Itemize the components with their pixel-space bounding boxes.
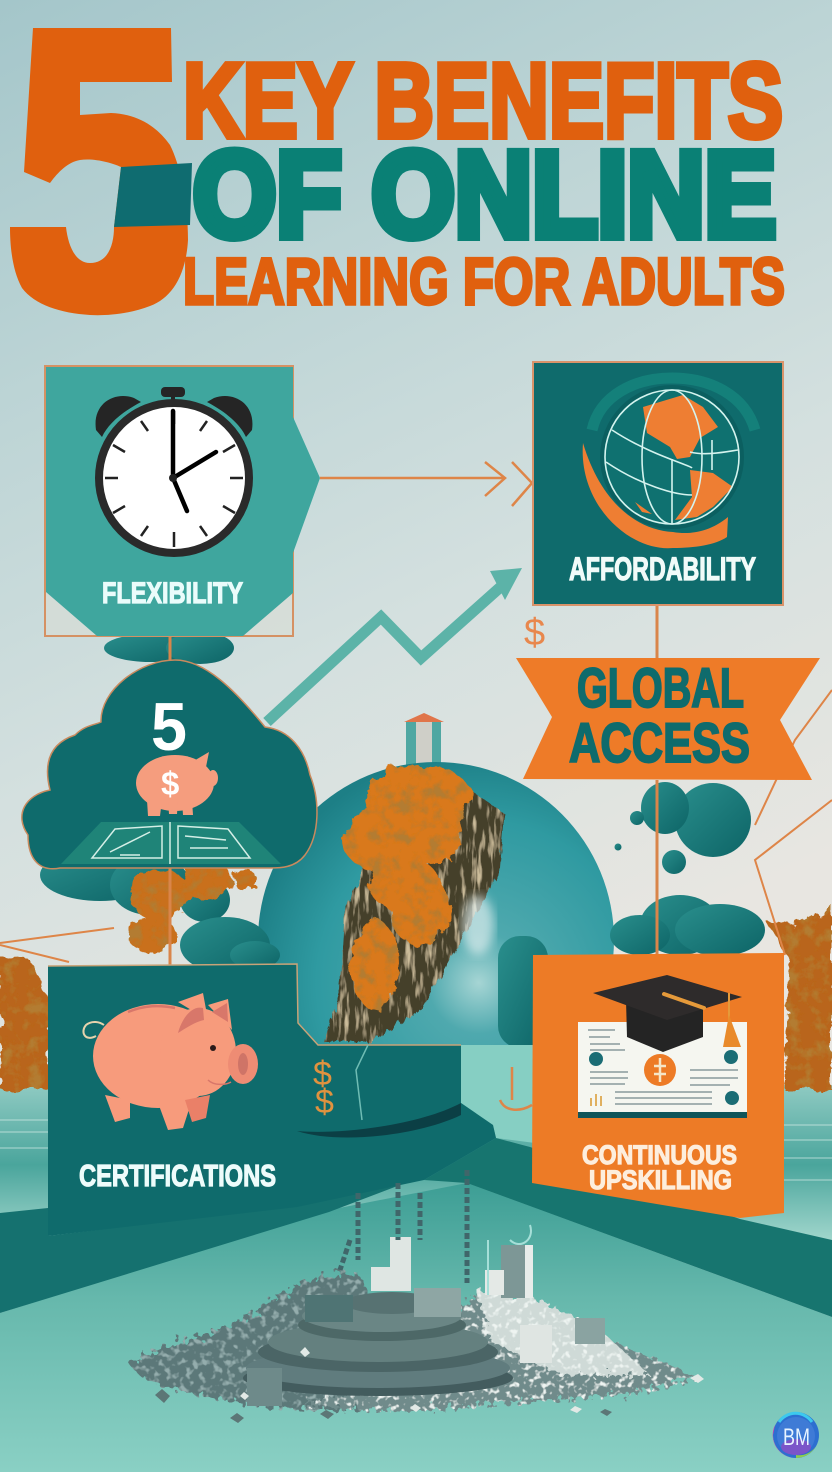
banner: global access <box>516 656 820 780</box>
teal block on numeral <box>114 163 192 227</box>
plants <box>340 1170 467 1283</box>
arrow flexibility to affordability <box>320 462 532 506</box>
label: AFFORDABILITY <box>569 551 756 587</box>
tower on globe <box>404 713 444 768</box>
icon: dollar ornaments: $ <box>313 1055 332 1093</box>
rubble base light <box>300 1295 700 1412</box>
background sky <box>0 0 832 1110</box>
icon: graduation cap <box>593 975 742 1052</box>
globe sphere <box>258 762 614 1118</box>
white blocks <box>247 1237 605 1406</box>
water streaks <box>0 1120 832 1180</box>
logo badge <box>773 1412 819 1458</box>
banner text line 2: ACCESS <box>569 711 750 774</box>
panel: flexibility <box>45 366 320 636</box>
shadow slit <box>297 1103 461 1138</box>
dark road band right <box>424 1138 832 1317</box>
orange foliage <box>342 765 472 1010</box>
rubble white slope <box>477 1290 650 1375</box>
panel: continuous upskilling <box>532 953 784 1218</box>
waterfall mist <box>462 895 494 955</box>
white number 5: 5 <box>151 689 187 765</box>
globe with island <box>258 713 614 1118</box>
scattered light stones <box>240 1347 704 1413</box>
panel shape <box>48 964 496 1236</box>
background water <box>0 1085 832 1245</box>
icon: small piggy bank <box>136 752 218 816</box>
panel box <box>533 362 783 605</box>
panel: affordability <box>533 362 783 605</box>
panel outline <box>45 366 293 636</box>
thin orange decorative lines <box>0 690 832 962</box>
icon: small piggy bank: $ <box>161 765 179 802</box>
icon: dollar ornaments <box>313 1055 334 1121</box>
title <box>10 28 785 318</box>
icon: dollar sign: $ <box>524 612 545 654</box>
panel fill <box>46 367 320 636</box>
small orange trees under cloud <box>128 860 257 953</box>
panel shape <box>532 953 784 1218</box>
cloud shape <box>22 660 317 869</box>
label line 1: CONTINUOUS <box>582 1140 737 1170</box>
background trees left <box>0 955 50 1090</box>
icon: open book <box>61 822 281 864</box>
icon: globe <box>583 378 755 548</box>
banner text line 1: GLOBAL <box>577 656 744 719</box>
rising zigzag arrow <box>267 568 522 722</box>
thin teal sprig <box>488 1225 531 1295</box>
panel: certifications <box>48 964 496 1236</box>
rock cliff <box>324 770 504 1042</box>
background trees right <box>765 905 832 1090</box>
panel: cloud with piggy and book <box>22 660 317 869</box>
dark road band left <box>0 1185 400 1313</box>
label: CERTIFICATIONS <box>79 1158 276 1193</box>
panel edge line <box>48 964 461 1045</box>
rubble pile with stepped podium <box>130 1170 704 1423</box>
diploma <box>578 1022 747 1118</box>
label: FLEXIBILITY <box>102 577 243 610</box>
steps <box>243 1292 513 1396</box>
rubble base dark <box>130 1274 420 1409</box>
scattered stones <box>155 1389 612 1423</box>
icon: piggy bank <box>83 993 258 1130</box>
icon: alarm clock <box>96 387 252 553</box>
background ground <box>0 1183 832 1472</box>
label line 2: UPSKILLING <box>589 1165 732 1195</box>
connector lines <box>170 605 657 966</box>
teal mounds behind panels <box>40 632 765 1048</box>
ledge highlight line <box>356 1045 368 1120</box>
icon: small orange arrow and curve <box>500 1067 532 1110</box>
big numeral 5 <box>10 28 188 315</box>
logo badge: BM <box>783 1424 810 1451</box>
light teal side block <box>461 1045 535 1143</box>
icon: dollar ornaments: $ <box>315 1083 334 1121</box>
